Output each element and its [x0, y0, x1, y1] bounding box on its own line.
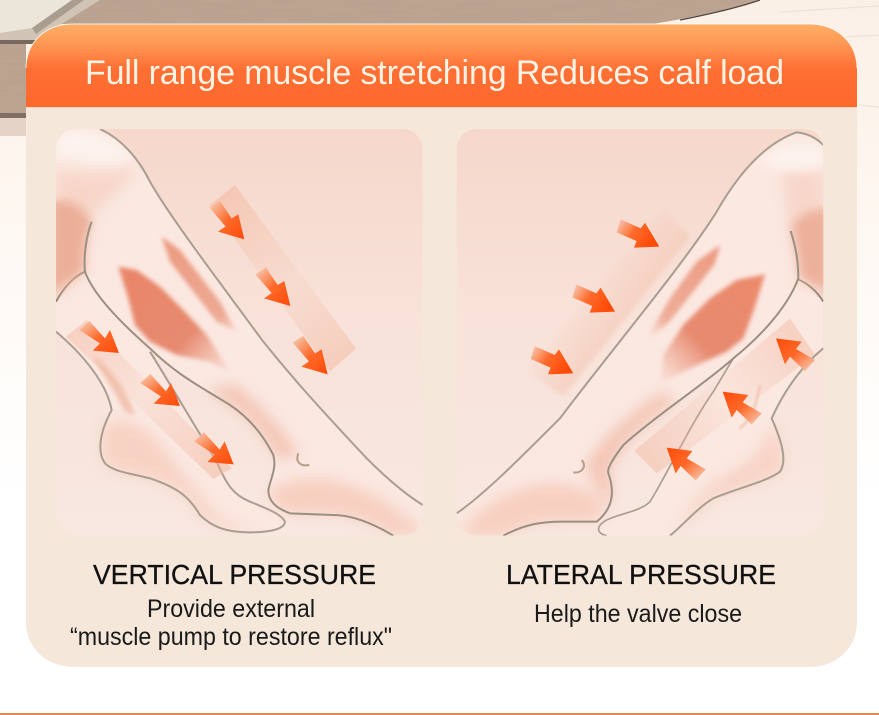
title: Full range muscle stretching Reduces calf load: [85, 54, 784, 92]
arrow: [293, 336, 328, 374]
arrows: downward pressure: [79, 201, 328, 464]
arrow: [255, 268, 290, 306]
bottom divider: [0, 713, 879, 715]
text block: vertical pressure description: [70, 595, 392, 651]
text block: lateral pressure description: Help the valve close: [534, 600, 742, 628]
pressure band lower: [66, 320, 232, 479]
panel: vertical pressure illustration: [50, 129, 423, 536]
arrow: [723, 392, 762, 424]
heading: lateral pressure: LATERAL PRESSURE: [506, 559, 776, 590]
arrow: [194, 432, 234, 464]
text block: vertical pressure description: “muscle pump to restore reflux": [70, 623, 392, 651]
arrow: [531, 346, 573, 374]
pressure band upper: [536, 218, 689, 396]
panel: lateral pressure illustration: [457, 129, 830, 536]
pressure band lower: [634, 318, 815, 473]
arrow: [617, 219, 659, 248]
heading: vertical pressure: VERTICAL PRESSURE: [93, 559, 376, 590]
pressure band upper: [210, 185, 356, 372]
background photo: wooden table and book: [0, 0, 879, 136]
front leg: [457, 132, 830, 536]
arrow: [140, 374, 180, 406]
front leg: [50, 129, 423, 536]
arrow: [776, 338, 815, 371]
arrow: [79, 321, 119, 353]
header banner: [26, 24, 857, 108]
muscles highlighted: [647, 245, 765, 383]
muscles highlighted: [118, 237, 237, 372]
text block: vertical pressure description: Provide external: [147, 595, 315, 623]
arrows: lateral pressure: [531, 219, 815, 480]
arrow: [572, 284, 615, 313]
arrow: [667, 448, 706, 480]
rear leg: [599, 279, 823, 536]
arrow: [209, 201, 244, 239]
rear leg: [56, 272, 285, 532]
